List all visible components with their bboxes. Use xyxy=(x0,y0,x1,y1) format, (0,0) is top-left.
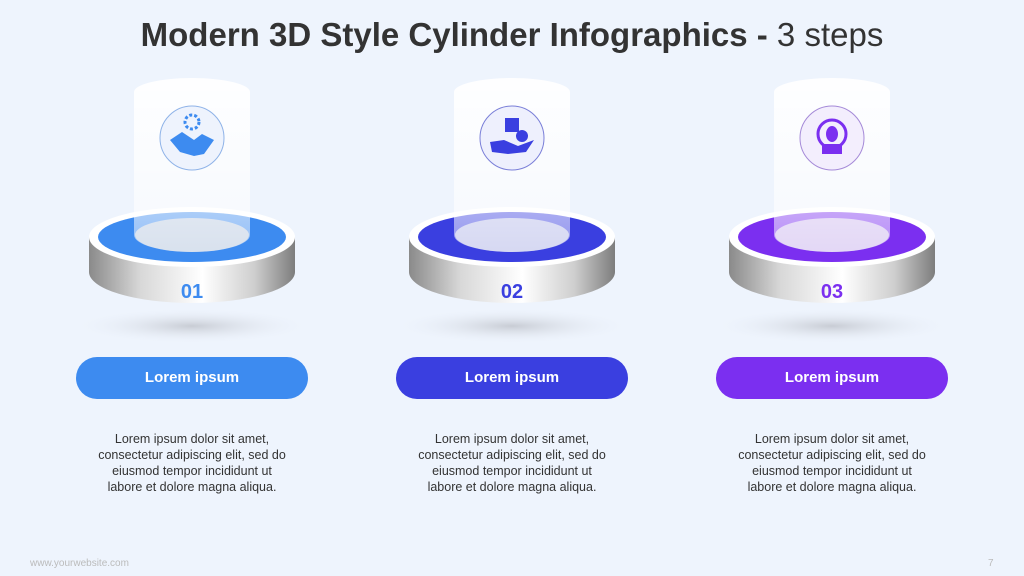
text 2: consectetur adipiscing elit, sed do xyxy=(418,448,606,462)
icon: handshake xyxy=(160,106,224,170)
text 1: eiusmod tempor incididunt ut xyxy=(112,464,272,478)
pill 3 xyxy=(716,357,948,399)
text 1: labore et dolore magna aliqua. xyxy=(108,480,276,494)
pill 2 xyxy=(396,357,628,399)
pill 3: Lorem ipsum xyxy=(785,369,879,386)
text 2: Lorem ipsum dolor sit amet, xyxy=(435,432,589,446)
footer website: www.yourwebsite.com xyxy=(30,558,129,569)
number 01: 01 xyxy=(181,281,203,303)
pill 2: Lorem ipsum xyxy=(465,369,559,386)
text 3: consectetur adipiscing elit, sed do xyxy=(738,448,926,462)
text 1 xyxy=(98,432,286,494)
pill 1: Lorem ipsum xyxy=(145,369,239,386)
page number: 7 xyxy=(988,558,994,569)
text 3: labore et dolore magna aliqua. xyxy=(748,480,916,494)
text 2 xyxy=(418,432,606,494)
icon: globe person xyxy=(800,106,864,170)
number 03: 03 xyxy=(821,281,843,303)
text 2: eiusmod tempor incididunt ut xyxy=(432,464,592,478)
icon: hand with coins xyxy=(480,106,544,170)
text 3: Lorem ipsum dolor sit amet, xyxy=(755,432,909,446)
text 3: eiusmod tempor incididunt ut xyxy=(752,464,912,478)
text 2: labore et dolore magna aliqua. xyxy=(428,480,596,494)
text 1: consectetur adipiscing elit, sed do xyxy=(98,448,286,462)
step 3 cylinder xyxy=(712,78,952,344)
step 2 cylinder xyxy=(392,78,632,344)
title: Modern 3D Style Cylinder Infographics - 3 steps xyxy=(141,16,883,53)
pill 1 xyxy=(76,357,308,399)
step 1 cylinder xyxy=(72,78,312,344)
text 3 xyxy=(738,432,926,494)
text 1: Lorem ipsum dolor sit amet, xyxy=(115,432,269,446)
number 02: 02 xyxy=(501,281,523,303)
